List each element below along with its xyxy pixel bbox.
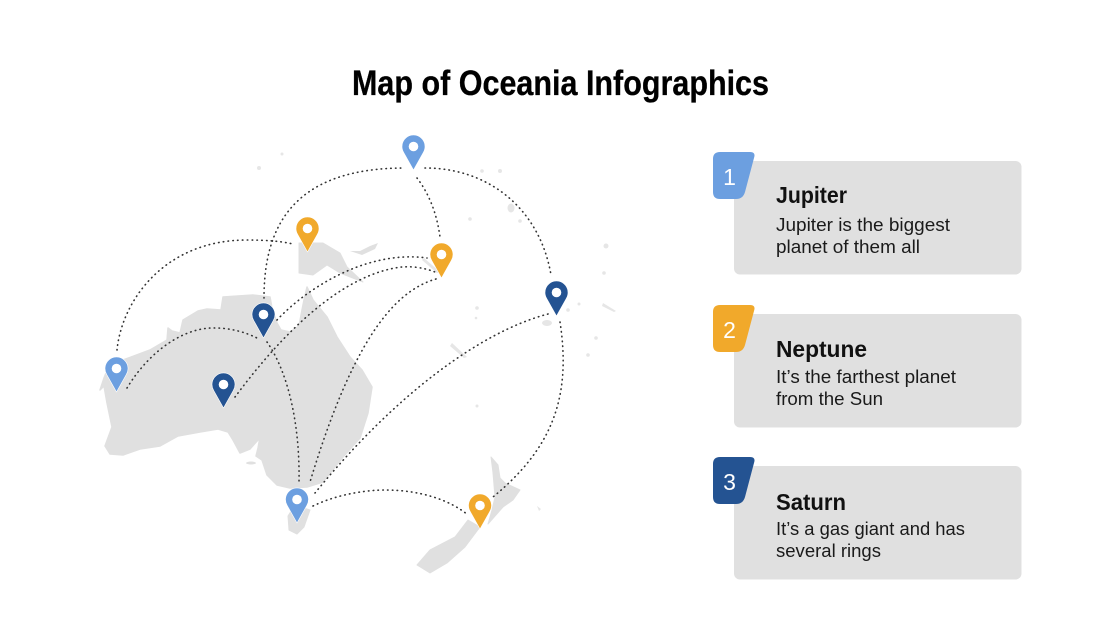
landmass: Australia [100, 287, 372, 488]
pin: north Australia navy [252, 303, 275, 338]
text: Neptune description: It’s the farthest planet [776, 367, 956, 387]
badge: 2 [713, 305, 754, 352]
landmass: New Britain [350, 243, 378, 255]
badge: 1: 1 [723, 164, 736, 190]
badge: 3 [713, 457, 754, 504]
heading: Neptune: Neptune [776, 336, 867, 362]
text: Jupiter description: planet of them all [776, 237, 920, 257]
landmass: New Zealand south island [417, 520, 480, 573]
pin: Solomon orange [430, 243, 453, 278]
pin: Tasmania light blue [286, 488, 308, 523]
text: Neptune description: from the Sun [776, 389, 883, 409]
badge: 1 [713, 152, 754, 199]
pin: Papua orange [296, 217, 319, 252]
text: Jupiter description: Jupiter is the biggest [776, 215, 950, 235]
text: Jupiter description [776, 215, 950, 257]
pin: west Australia light blue [105, 357, 128, 392]
text: Neptune description [776, 367, 956, 409]
pin: New Zealand orange [468, 494, 492, 529]
landmass: Tasmania [288, 505, 310, 534]
heading: Jupiter: Jupiter [776, 182, 847, 208]
heading: Saturn: Saturn [776, 489, 846, 515]
text: Saturn description: It’s a gas giant and has [776, 519, 965, 539]
badge: 2: 2 [723, 317, 736, 343]
pin: top light blue [402, 135, 425, 170]
small islands [257, 152, 616, 511]
title: Map of Oceania Infographics [352, 64, 769, 103]
panel: Jupiter [713, 152, 1022, 274]
map of Oceania [100, 152, 616, 573]
dotted route lines [117, 168, 563, 515]
text: Saturn description [776, 519, 965, 561]
landmass: Papua New Guinea [299, 243, 363, 282]
pin: central Australia navy [212, 373, 235, 408]
badge: 3: 3 [723, 469, 736, 495]
landmass: New Zealand north island [488, 457, 520, 524]
panel: Saturn [713, 457, 1022, 580]
text: Saturn description: several rings [776, 541, 881, 561]
panel: Neptune [713, 305, 1022, 428]
pin: Vanuatu navy [545, 281, 568, 316]
landmass: Kangaroo Island [246, 462, 256, 464]
